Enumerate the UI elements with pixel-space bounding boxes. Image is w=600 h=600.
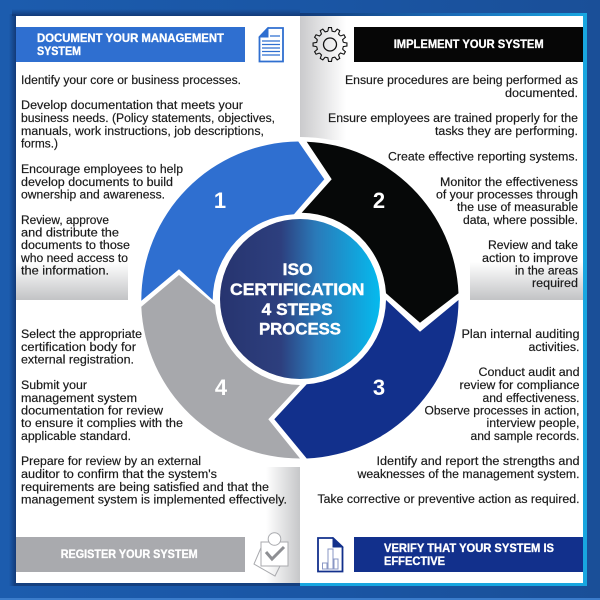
text: step 2 implement details: Create effective reporting systems. bbox=[388, 152, 578, 164]
header: implement your system bbox=[354, 27, 583, 62]
text: step 4 register details: to ensure it complies with the bbox=[21, 418, 183, 430]
text: step 2 implement details: in the areas bbox=[515, 266, 578, 278]
text: step 2 implement details: required bbox=[532, 278, 578, 290]
text: step 1 document details: manuals, work instructions, job descriptions, bbox=[21, 126, 264, 138]
text: step 3 verify details: weaknesses of the management system. bbox=[356, 469, 580, 481]
cycle diagram bbox=[137, 137, 463, 463]
text: step 4 register details: applicable standard. bbox=[21, 431, 131, 443]
text: step 4 register details: certification body for bbox=[21, 342, 136, 354]
centre title: PROCESS bbox=[259, 320, 341, 338]
text: step 2 implement details: data, where possible. bbox=[463, 215, 578, 227]
text: step 1 document details: and distribute the bbox=[21, 228, 119, 240]
text: step 3 verify details: and sample records. bbox=[470, 431, 580, 443]
header: document your management system: DOCUMENT YOUR MANAGEMENT bbox=[37, 33, 224, 45]
text: step 4 register details: Select the appropriate bbox=[21, 329, 142, 341]
header: document your management system bbox=[16, 27, 245, 62]
header: verify that your system is effective: EFFECTIVE bbox=[384, 556, 445, 568]
segment 2: black arrow bbox=[302, 142, 458, 323]
text: step 1 document details: Encourage employees to help bbox=[21, 164, 183, 176]
text: step 1 document details: who need access to bbox=[20, 253, 128, 265]
text: step 2 implement details: documented. bbox=[505, 88, 578, 100]
text: step 2 implement details bbox=[328, 75, 578, 290]
text: step 4 register details: documentation for review bbox=[21, 406, 164, 418]
text: step 1 document details: develop documents to build bbox=[21, 177, 173, 189]
header: register your system: REGISTER YOUR SYSTEM bbox=[61, 549, 198, 561]
step numbers: 2 bbox=[373, 188, 385, 213]
header: verify that your system is effective bbox=[354, 537, 583, 572]
text: step 1 document details bbox=[20, 75, 275, 278]
step numbers: 4 bbox=[215, 375, 228, 400]
text: step 3 verify details: Identify and report the strengths and bbox=[376, 456, 580, 468]
text: step 3 verify details: Observe processes in action, bbox=[424, 406, 580, 418]
text: step 1 document details: business needs. (Policy statements, objectives, bbox=[21, 113, 275, 125]
text: step 2 implement details: tasks they are performing. bbox=[435, 126, 578, 138]
centre title bbox=[230, 260, 364, 338]
text: step 4 register details: Submit your bbox=[21, 380, 87, 392]
text: step 3 verify details: review for compliance bbox=[460, 380, 580, 392]
text: step 1 document details: documents to those bbox=[21, 240, 130, 252]
text: step 4 register details: requirements are being satisfied and that the bbox=[21, 482, 269, 494]
text: step 2 implement details: Ensure employees are trained properly for the bbox=[328, 113, 578, 125]
icon: chart document bbox=[318, 538, 342, 572]
header: register your system bbox=[16, 537, 245, 572]
text: step 1 document details: Identify your core or business processes. bbox=[21, 75, 241, 87]
centre circle bbox=[220, 219, 380, 379]
text: step 3 verify details: activities. bbox=[528, 342, 580, 354]
text: step 4 register details: external registration. bbox=[21, 354, 134, 366]
step numbers: 3 bbox=[373, 375, 385, 400]
centre title: 4 STEPS bbox=[262, 300, 333, 319]
text: step 2 implement details: the use of measurable bbox=[457, 202, 578, 214]
icon: checklist bbox=[254, 533, 288, 576]
centre title: ISO bbox=[283, 260, 313, 279]
text: step 3 verify details bbox=[318, 329, 580, 506]
text: step 2 implement details: of your processes through bbox=[436, 190, 578, 202]
text: step 3 verify details: Plan internal auditing bbox=[462, 329, 580, 341]
centre title: CERTIFICATION bbox=[230, 280, 364, 299]
text: step 1 document details: the information. bbox=[21, 266, 109, 278]
segment 3: navy arrow bbox=[274, 300, 458, 458]
text: step 4 register details: Prepare for review by an external bbox=[21, 456, 201, 468]
text: step 2 implement details: action to improve bbox=[482, 253, 578, 265]
header: verify that your system is effective: VERIFY THAT YOUR SYSTEM IS bbox=[384, 543, 554, 555]
text: step 4 register details: management system is implemented effectively. bbox=[21, 494, 287, 506]
text: step 1 document details: ownership and awareness. bbox=[21, 190, 165, 202]
text: step 4 register details bbox=[21, 329, 287, 506]
header: implement your system: IMPLEMENT YOUR SYSTEM bbox=[394, 39, 544, 51]
text: step 4 register details: management system bbox=[21, 393, 137, 405]
step numbers: 1 bbox=[214, 188, 226, 213]
text: step 2 implement details: Monitor the effectiveness bbox=[440, 177, 578, 189]
text: step 2 implement details: Review and take bbox=[488, 240, 578, 252]
segment 4: grey arrow bbox=[141, 275, 300, 459]
icon: document bbox=[260, 28, 283, 62]
text: step 1 document details: forms.) bbox=[21, 138, 58, 150]
text: step 2 implement details: Ensure procedures are being performed as bbox=[345, 75, 578, 87]
text: step 1 document details: Review, approve bbox=[21, 215, 109, 227]
segment 1: blue arrow bbox=[141, 142, 324, 301]
header: document your management system: SYSTEM bbox=[37, 46, 81, 58]
text: step 3 verify details: interview people, bbox=[486, 418, 580, 430]
text: step 1 document details: Develop documentation that meets your bbox=[21, 100, 243, 112]
text: step 3 verify details: Conduct audit and bbox=[478, 367, 580, 379]
text: step 3 verify details: and effectiveness. bbox=[482, 393, 580, 405]
text: step 4 register details: auditor to confirm that the system's bbox=[21, 469, 217, 481]
icon: gear bbox=[313, 27, 347, 62]
text: step 3 verify details: Take corrective or preventive action as required. bbox=[318, 494, 580, 506]
step numbers bbox=[214, 188, 385, 400]
